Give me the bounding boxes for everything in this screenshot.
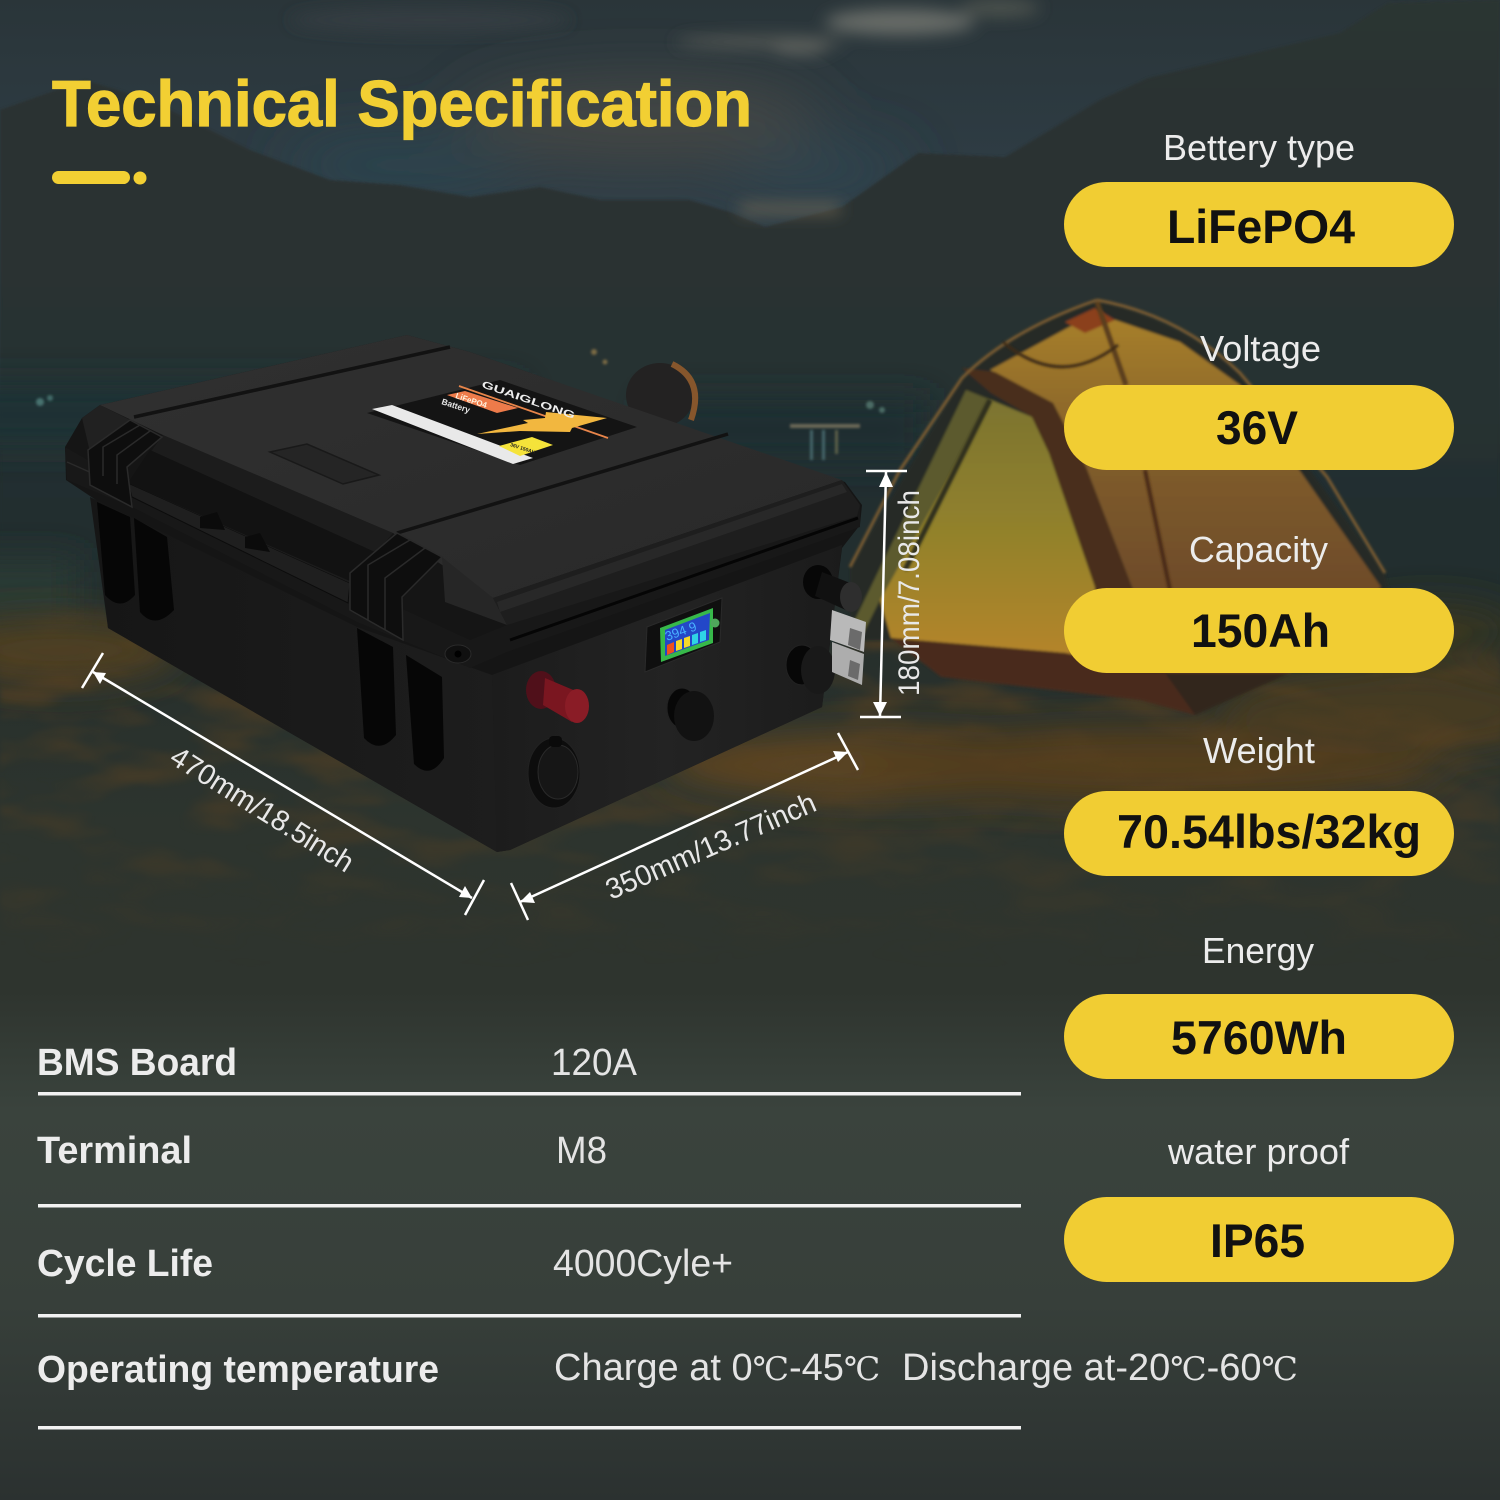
hinge screw [445, 645, 471, 663]
table row: cycle life: 4000Cyle+ [553, 1243, 733, 1285]
lid top face [100, 335, 842, 598]
lid right bevel [493, 480, 860, 625]
sticker [367, 379, 637, 465]
dimension: width arrow [511, 733, 858, 920]
case left face [90, 497, 497, 852]
spec: weight: 70.54lbs/32kg [1117, 805, 1421, 858]
title accent [52, 171, 146, 184]
centre latch [350, 533, 442, 640]
lower lip flange [65, 447, 860, 668]
table row: operating temperature [37, 1347, 1298, 1430]
grass mottled texture [0, 640, 1499, 886]
case right face [492, 545, 842, 852]
spec: energy [1064, 930, 1454, 1079]
table row: BMS board: BMS Board [37, 1042, 237, 1084]
grey Anderson connector [830, 610, 866, 685]
spec: weight: Weight [1203, 730, 1315, 771]
mountains [0, 0, 1500, 640]
spec: weight [1064, 730, 1454, 876]
spec: capacity: Capacity [1189, 529, 1328, 570]
dimension label: width: 350mm/13.77inch [601, 787, 821, 906]
spec: energy: 5760Wh [1171, 1011, 1347, 1064]
sticker: 36V 150AH [509, 442, 536, 456]
spec: voltage: Voltage [1200, 328, 1321, 369]
cigarette socket [528, 736, 580, 808]
front latch notches [200, 512, 270, 552]
sticker: LiFePO4 [454, 391, 489, 410]
table row: operating temperature: Discharge at-20℃-60℃ [902, 1347, 1298, 1389]
table row: BMS board [37, 1042, 1021, 1096]
front strip under left bevel [128, 483, 350, 603]
tent dark backing [850, 300, 1400, 640]
lid left corner [82, 405, 130, 452]
table row: operating temperature: Operating temperature [37, 1349, 439, 1391]
spec: battery type [1064, 127, 1454, 267]
right port cap [786, 645, 835, 694]
spec: voltage: 36V [1216, 401, 1299, 454]
spec: battery type: Bettery type [1163, 127, 1355, 168]
town lights [740, 205, 840, 213]
lid straps [134, 347, 728, 533]
lake band [0, 385, 930, 620]
table row: terminal: Terminal [37, 1130, 192, 1172]
table row: cycle life [37, 1243, 1021, 1318]
tent [850, 300, 1400, 715]
sticker: GUAIGLONG [480, 379, 577, 422]
lid left bevel [128, 435, 393, 583]
distant figure [626, 363, 695, 427]
spec: battery type: LiFePO4 [1167, 200, 1355, 253]
spec: energy: Energy [1202, 930, 1314, 971]
spec: water proof [1064, 1131, 1454, 1282]
table row: terminal: M8 [556, 1130, 607, 1172]
grass glow [0, 602, 1500, 803]
dimension label: length: 470mm/18.5inch [164, 741, 359, 879]
spec: capacity: 150Ah [1191, 604, 1330, 657]
dimension: length arrow [82, 653, 484, 915]
table row: terminal [37, 1130, 1021, 1208]
battery case [65, 335, 866, 852]
case silhouette [65, 335, 862, 852]
sticker: Battery [440, 396, 472, 415]
table row: cycle life: Cycle Life [37, 1243, 213, 1285]
battery meter display [645, 598, 722, 672]
dimension: height arrow [860, 471, 907, 717]
battery meter display: 394 9 [663, 619, 699, 644]
case side ribs [97, 502, 444, 771]
spec: capacity [1064, 529, 1454, 673]
dimension label: height: 180mm/7.08inch [893, 490, 926, 696]
black knob [803, 565, 862, 612]
spec: water proof: IP65 [1210, 1214, 1305, 1267]
spec: voltage [1064, 328, 1454, 470]
lid recess [270, 444, 379, 484]
table row: operating temperature: Charge at 0℃-45℃ [554, 1347, 880, 1389]
centre port cap [667, 688, 714, 741]
title: Technical Specification [52, 67, 752, 140]
left latch [88, 420, 162, 507]
table row: BMS board: 120A [551, 1042, 638, 1084]
red fuse knob [526, 671, 589, 723]
spec: water proof: water proof [1167, 1131, 1350, 1172]
